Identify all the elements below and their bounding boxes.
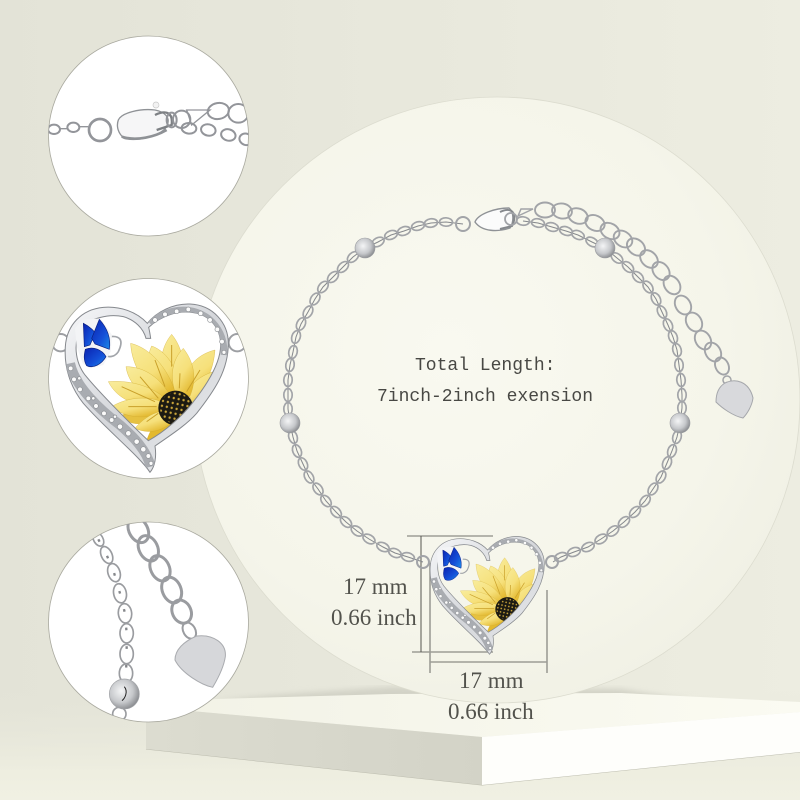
shadow on wall behind disc [213,687,690,706]
dimension label: height [331,574,417,630]
platform right face [482,712,800,785]
text: total length: 7inch-2inch exension [377,387,593,407]
ground [0,690,800,800]
dimension label: height: 0.66 inch [331,605,417,630]
chain core [288,221,682,562]
platform contact shadow [146,749,800,785]
side rings [52,334,246,351]
detail circle: extension and tag [48,514,248,722]
dimension lines [407,536,547,673]
dimension label: width: 17 mm [459,668,524,693]
text: total length [377,356,593,407]
beads [280,238,690,433]
platform top surface [146,693,800,737]
dimension label: width: 0.66 inch [448,699,534,724]
lobster clasp [456,208,533,231]
chain links [284,216,686,563]
heart tag [716,376,753,418]
dimension label: width [448,668,534,724]
platform left face [146,707,482,785]
large backdrop disc [194,97,800,703]
dimension label: height: 17 mm [343,574,408,599]
bracelet [280,202,753,654]
platform [146,693,800,785]
jump rings [417,556,558,568]
text: total length: Total Length: [415,356,555,376]
detail circle: clasp [48,36,254,236]
sunflower heart pendant [430,536,544,654]
detail circle: heart pendant [48,278,248,478]
extension chain [535,202,732,377]
